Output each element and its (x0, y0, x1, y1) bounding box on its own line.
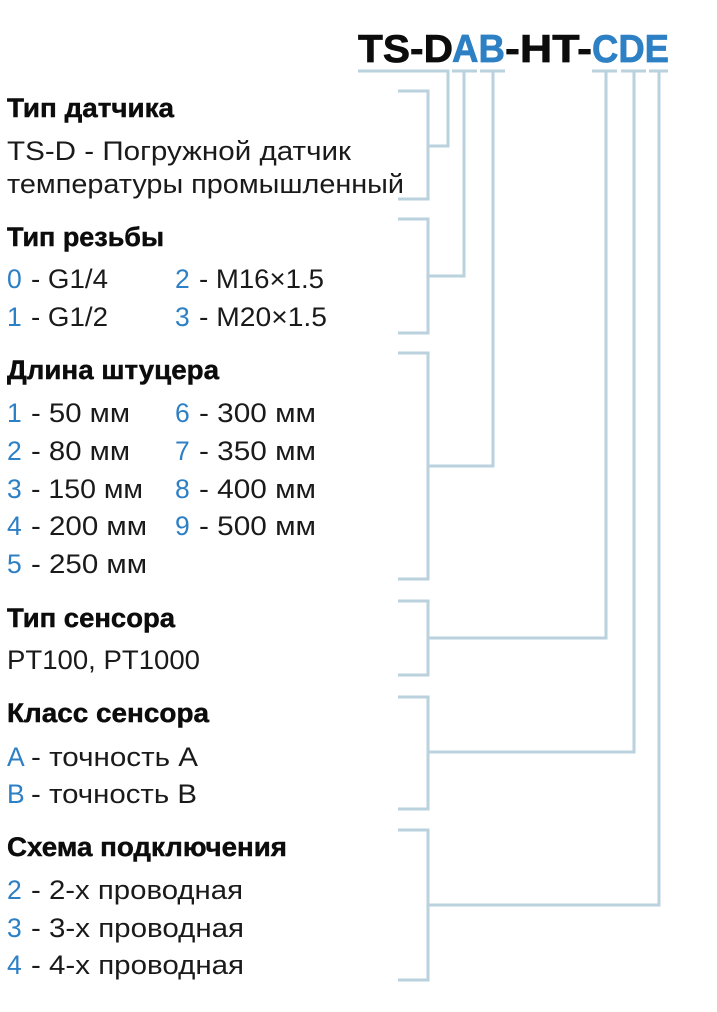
panel: fitting length: - 500 мм (199, 511, 316, 541)
title: model code: TS-D (358, 28, 453, 71)
title: model code (358, 28, 669, 71)
panel: thread type: 0 (7, 264, 22, 294)
panel: wiring scheme (7, 832, 287, 980)
panel: wiring scheme: 4 (7, 950, 22, 980)
panel: fitting length: - 350 мм (199, 436, 316, 466)
panel: fitting length: - 50 мм (31, 398, 130, 428)
panel: thread type (7, 222, 327, 332)
panel: thread type: 2 (175, 264, 190, 294)
panel: fitting length: - 250 мм (31, 549, 147, 579)
panel: sensor type (7, 93, 404, 199)
panel: sensor class: A (7, 742, 25, 772)
panel: fitting length: 9 (175, 511, 190, 541)
panel: sensor kind: Тип сенсора (7, 603, 175, 633)
title: model code: AB (452, 28, 505, 71)
panel: sensor kind: PT100, PT1000 (7, 645, 200, 675)
panel: sensor class: B (7, 779, 25, 809)
panel: fitting length: 1 (7, 398, 22, 428)
panel: fitting length: Длина штуцера (7, 355, 219, 385)
panel: wiring scheme: - 4-х проводная (31, 950, 244, 980)
panel: fitting length: - 150 мм (31, 474, 143, 504)
panel: thread type: - G1/2 (31, 302, 108, 332)
panel: wiring scheme: Схема подключения (7, 832, 287, 862)
title: model code: CDE (592, 28, 669, 71)
panel: thread type: 3 (175, 302, 190, 332)
panel: thread type: Тип резьбы (7, 222, 164, 252)
panel: wiring scheme: 2 (7, 875, 22, 905)
panel: thread type: - G1/4 (31, 264, 108, 294)
panel: thread type: - M20×1.5 (199, 302, 327, 332)
connector: fitting length bracket (398, 71, 505, 579)
connector: thread type bracket (398, 71, 477, 333)
panel: wiring scheme: 3 (7, 913, 22, 943)
panel: wiring scheme: - 2-х проводная (31, 875, 243, 905)
connector: sensor kind bracket (398, 71, 617, 675)
panel: fitting length: - 200 мм (31, 511, 147, 541)
panel: fitting length: 5 (7, 549, 22, 579)
panel: wiring scheme: - 3-х проводная (31, 913, 244, 943)
panel: fitting length: 3 (7, 474, 22, 504)
panel: fitting length: - 80 мм (31, 436, 130, 466)
panel: fitting length: 7 (175, 436, 190, 466)
panel: fitting length: 2 (7, 436, 22, 466)
panel: sensor class: - точность А (31, 742, 198, 772)
panel: thread type: 1 (7, 302, 22, 332)
title: model code: -HT- (505, 28, 592, 71)
panel: fitting length (7, 355, 316, 579)
connector: sensor class bracket (398, 71, 646, 809)
panel: sensor class: Класс сенсора (7, 698, 209, 728)
panel: fitting length: 6 (175, 398, 190, 428)
panel: sensor type: температуры промышленный (7, 169, 404, 199)
connector: sensor type bracket (358, 71, 448, 199)
panel: sensor kind (7, 603, 200, 675)
panel: fitting length: - 300 мм (199, 398, 316, 428)
panel: fitting length: 8 (175, 474, 190, 504)
panel: sensor class: - точность В (31, 779, 197, 809)
panel: sensor class (7, 698, 209, 809)
panel: sensor type: Тип датчика (7, 93, 174, 123)
panel: fitting length: - 400 мм (199, 474, 316, 504)
panel: thread type: - M16×1.5 (199, 264, 324, 294)
connector: wiring scheme bracket (398, 71, 668, 980)
panel: sensor type: TS-D - Погружной датчик (7, 136, 351, 166)
panel: fitting length: 4 (7, 511, 22, 541)
